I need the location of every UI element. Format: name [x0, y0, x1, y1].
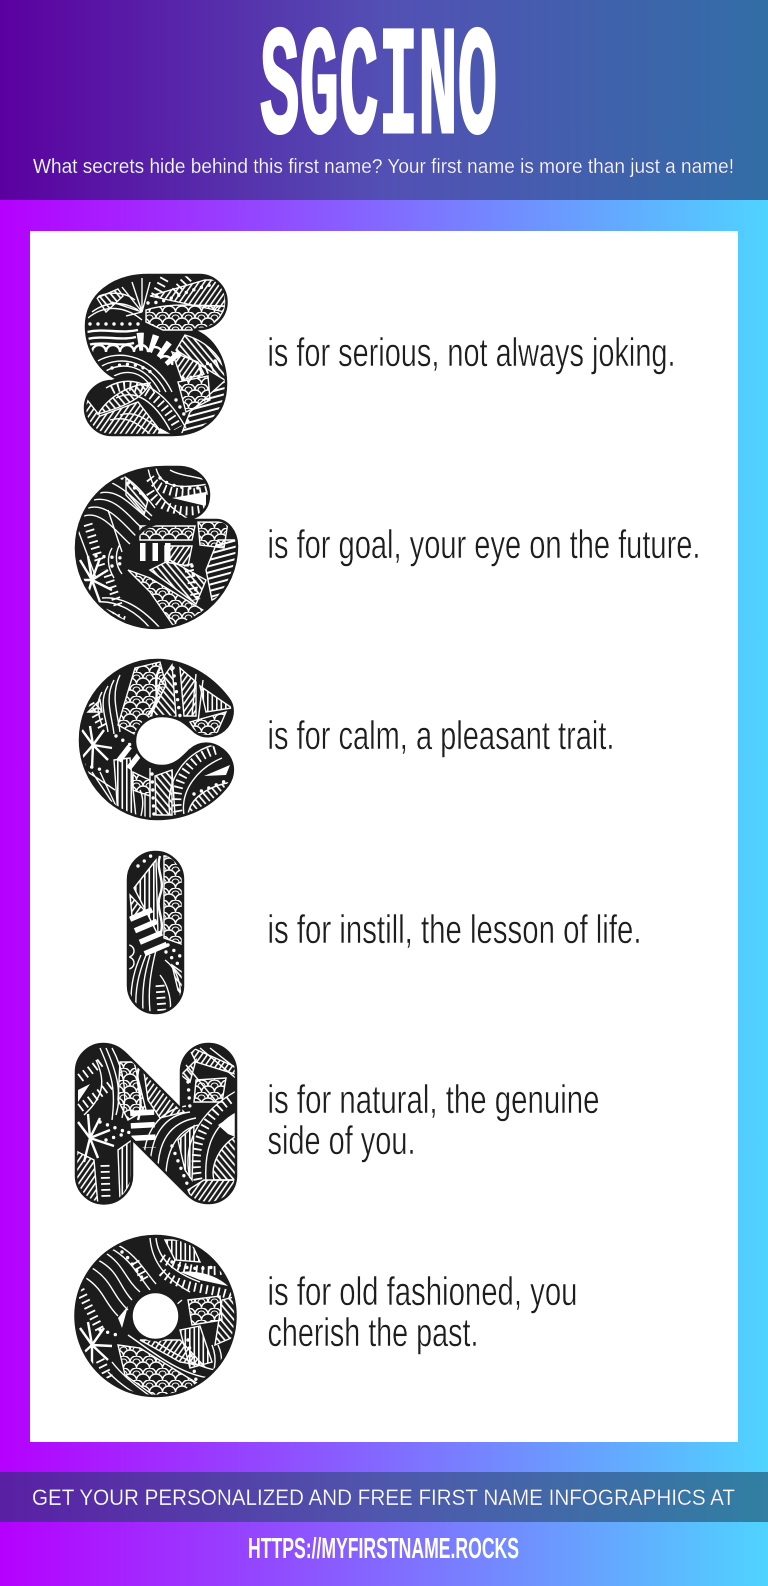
text: N lines: [268, 1078, 600, 1163]
title: SGCINO: [260, 3, 497, 179]
letter N illustration: [74, 1044, 240, 1206]
text: O lines: [268, 1270, 578, 1355]
white content panel: [30, 231, 738, 1442]
footer call to action: GET YOUR PERSONALIZED AND FREE FIRST NAME INFOGRAPHICS AT: [32, 1485, 735, 1510]
letter I illustration: [128, 852, 186, 1013]
text: O lines: cherish the past.: [268, 1311, 478, 1355]
text: O lines: is for old fashioned, you: [268, 1270, 578, 1314]
footer band: [0, 1472, 768, 1522]
letter C illustration: [80, 660, 233, 820]
letter S illustration: [84, 275, 228, 438]
footer url: HTTPS://MYFIRSTNAME.ROCKS: [248, 1533, 519, 1565]
text: I line: is for instill, the lesson of life.: [268, 908, 642, 952]
text: N lines: side of you.: [268, 1119, 416, 1163]
letter G illustration: [76, 467, 240, 628]
text: C line: is for calm, a pleasant trait.: [268, 714, 614, 758]
text: N lines: is for natural, the genuine: [268, 1078, 600, 1122]
header band: [0, 0, 768, 200]
subtitle: What secrets hide behind this first name? Your first name is more than just a name!: [33, 155, 734, 178]
letter O illustration: [75, 1236, 238, 1400]
